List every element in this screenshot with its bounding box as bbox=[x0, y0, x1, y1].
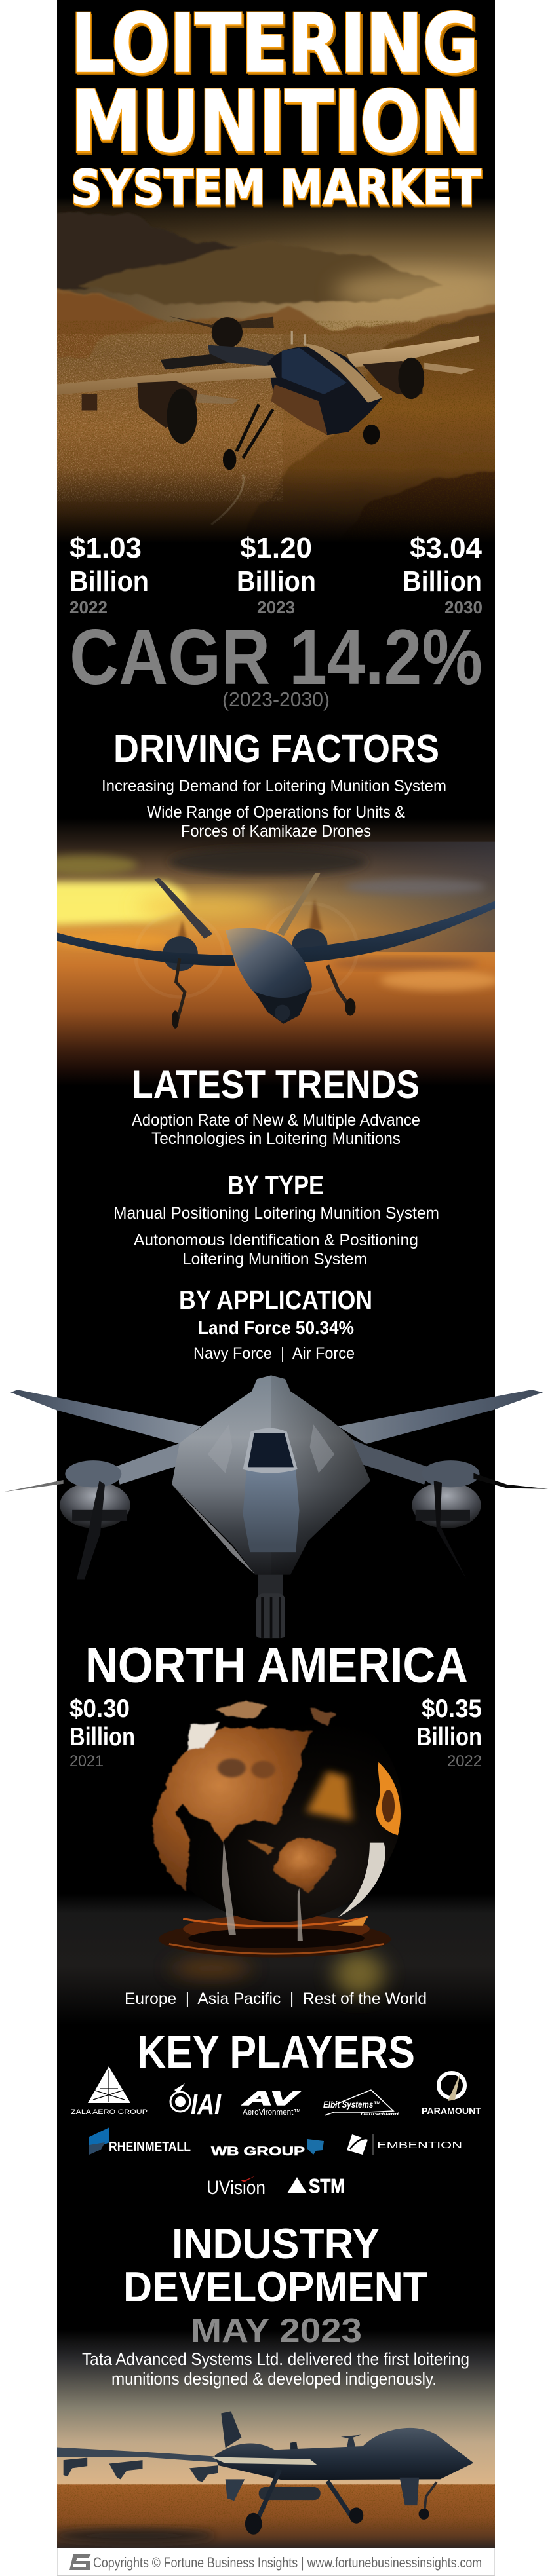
logo: wb group: WB GROUP bbox=[211, 2145, 305, 2159]
stat: north america 2021: 2021 bbox=[69, 1752, 104, 1770]
text block: driving factors: Wide Range of Operations for Units & bbox=[147, 803, 405, 822]
icon: hero drone bbox=[57, 316, 479, 470]
panel: market size figures bbox=[69, 532, 483, 617]
logo: STM bbox=[287, 2174, 345, 2197]
stat: north america 2022: $0.35 bbox=[422, 1695, 482, 1723]
heading: industry development bbox=[123, 2220, 427, 2311]
icon: reaper drone bbox=[57, 2411, 473, 2535]
stat: north america 2021: Billion bbox=[69, 1723, 135, 1751]
footer bbox=[57, 2548, 495, 2576]
title bbox=[71, 0, 482, 218]
title line: MUNITION: MUNITION bbox=[71, 73, 480, 171]
text block: latest trends: Adoption Rate of New & Multiple Advance bbox=[132, 1111, 420, 1129]
text block: by application bbox=[193, 1317, 355, 1363]
title line: LOITERING: LOITERING bbox=[71, 0, 479, 92]
logo: rheinmetall bbox=[89, 2127, 191, 2155]
text block: by type: Manual Positioning Loitering Munition System bbox=[113, 1204, 439, 1222]
text block: driving factors: Forces of Kamikaze Drones bbox=[181, 822, 371, 841]
logo: paramount: PARAMOUNT bbox=[422, 2106, 481, 2117]
stat: 2022: 2022 bbox=[69, 597, 108, 617]
stat: 2030: $3.04 bbox=[410, 532, 483, 564]
icon: fortune business insights logo bbox=[69, 2554, 91, 2570]
stat: 2023: $1.20 bbox=[240, 532, 312, 564]
logo: aerovironment: AeroVironment™ bbox=[243, 2107, 301, 2117]
title line: MUNITION: MUNITION bbox=[71, 74, 480, 172]
title line: SYSTEM MARKET: SYSTEM MARKET bbox=[71, 162, 482, 218]
text block: driving factors: Increasing Demand for Loitering Munition System bbox=[102, 777, 446, 795]
stat: 2030 bbox=[403, 532, 483, 617]
heading: industry development: INDUSTRY bbox=[172, 2220, 380, 2267]
heading: driving factors: DRIVING FACTORS bbox=[113, 727, 439, 770]
CAGR headline: CAGR 14.2% bbox=[69, 613, 483, 701]
heading: by application: BY APPLICATION bbox=[179, 1285, 372, 1315]
logo: paramount bbox=[422, 2073, 481, 2117]
stat: north america 2021: $0.30 bbox=[69, 1695, 130, 1723]
stat: north america 2021 bbox=[69, 1695, 135, 1770]
heading: by type: BY TYPE bbox=[227, 1170, 324, 1200]
text block: by type: Loitering Munition System bbox=[182, 1250, 367, 1268]
logo: uvision: UVision bbox=[207, 2177, 266, 2199]
date: may 2023: MAY 2023 bbox=[191, 2312, 362, 2350]
logo: IAI bbox=[170, 2083, 222, 2121]
text block: industry development bbox=[82, 2349, 469, 2389]
logo: IAI: IAI bbox=[191, 2089, 222, 2121]
hero image: drone over mountain valley bbox=[57, 200, 495, 538]
title line: MUNITION: MUNITION bbox=[72, 76, 482, 174]
heading: latest trends: LATEST TRENDS bbox=[132, 1063, 420, 1107]
title line: LOITERING: LOITERING bbox=[72, 0, 481, 94]
title line: SYSTEM MARKET: SYSTEM MARKET bbox=[71, 160, 481, 216]
text block: by application: Land Force 50.34% bbox=[198, 1317, 354, 1338]
image: sunset sky with drone bbox=[31, 818, 500, 1086]
stat: 2023 bbox=[237, 532, 316, 617]
text block: by type bbox=[113, 1204, 439, 1268]
logos: key players bbox=[71, 2066, 481, 2199]
logo: rheinmetall: RHEINMETALL bbox=[109, 2140, 191, 2154]
logo: elbit systems: Elbit Systems™ bbox=[323, 2099, 381, 2110]
image: copper globe on glass base bbox=[57, 1693, 495, 2026]
stat: north america 2022: 2022 bbox=[447, 1752, 482, 1770]
text block: other regions: Europe | Asia Pacific | Rest of the World bbox=[125, 1990, 427, 2008]
text block: by type: Autonomous Identification & Positioning bbox=[134, 1231, 418, 1249]
heading: north america: NORTH AMERICA bbox=[85, 1638, 468, 1694]
black content panel bbox=[57, 0, 495, 2550]
stat: 2023: Billion bbox=[237, 565, 316, 597]
logo: zala aero group: ZALA AERO GROUP bbox=[71, 2108, 148, 2116]
stat: 2030: 2030 bbox=[444, 597, 483, 617]
icon: landing gear base bbox=[256, 1625, 285, 1638]
heading: industry development: DEVELOPMENT bbox=[123, 2263, 427, 2311]
logo: aerovironment: AV bbox=[242, 2088, 301, 2110]
text block: by application: Navy Force | Air Force bbox=[193, 1344, 355, 1363]
logo: wb group bbox=[211, 2139, 324, 2159]
text block: latest trends: Technologies in Loitering Munitions bbox=[151, 1129, 401, 1148]
logo: STM: STM bbox=[309, 2174, 345, 2197]
logo: embention bbox=[347, 2134, 462, 2155]
text block: latest trends bbox=[132, 1111, 420, 1148]
logo: zala aero group bbox=[71, 2066, 148, 2116]
title line: SYSTEM MARKET: SYSTEM MARKET bbox=[71, 161, 481, 217]
CAGR period: (2023-2030) bbox=[222, 688, 330, 711]
icon: globe base bbox=[159, 1915, 391, 1958]
heading: key players: KEY PLAYERS bbox=[137, 2026, 415, 2077]
icon: sunset drone bbox=[57, 873, 495, 1029]
logo: elbit systems bbox=[323, 2090, 400, 2117]
icon: globe sphere bbox=[151, 1693, 403, 1941]
logo: elbit systems: Deutschland bbox=[361, 2112, 400, 2117]
stat: 2022: $1.03 bbox=[69, 532, 142, 564]
stat: 2023: 2023 bbox=[257, 597, 295, 617]
image: front view grey drone bbox=[3, 1375, 548, 1638]
stat: 2022 bbox=[69, 532, 149, 617]
stat: north america 2022 bbox=[416, 1695, 482, 1770]
logo: embention: EMBENTION bbox=[377, 2140, 462, 2151]
logo: aerovironment bbox=[242, 2088, 301, 2117]
stat: 2022: Billion bbox=[69, 565, 149, 597]
image: reaper drone on airfield at dusk bbox=[53, 2330, 495, 2548]
text block: driving factors bbox=[102, 777, 446, 841]
text block: industry development: munitions designed & developed indigenously. bbox=[111, 2369, 437, 2389]
text block: industry development: Tata Advanced Systems Ltd. delivered the first loitering bbox=[82, 2349, 469, 2369]
stat: north america 2022: Billion bbox=[416, 1723, 482, 1751]
stat: 2030: Billion bbox=[403, 565, 482, 597]
